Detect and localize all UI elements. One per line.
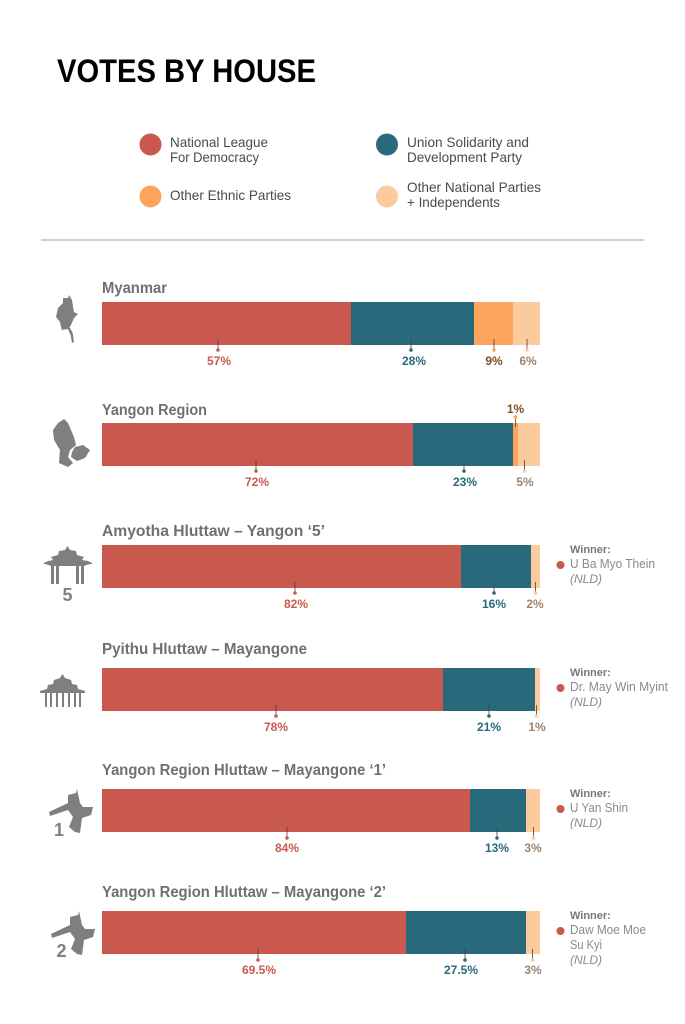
stacked bar xyxy=(102,911,540,954)
winner: Winner: xyxy=(570,788,611,800)
winner xyxy=(556,788,628,830)
panel: Yangon Region Hluttaw Mayangone 1 xyxy=(49,762,628,855)
winner: U Ba Myo Thein xyxy=(570,556,655,571)
winner: (NLD) xyxy=(570,695,602,709)
heading: Myanmar xyxy=(102,280,167,297)
value labels xyxy=(207,339,537,368)
value labels: 3% xyxy=(524,841,542,855)
icon: Yangon Region map xyxy=(53,419,90,467)
legend item: National League for Democracy: National League xyxy=(170,134,268,150)
legend item: USDP: Union Solidarity and xyxy=(407,134,529,150)
value labels xyxy=(242,949,542,977)
icon: pagoda gate 5 xyxy=(43,546,93,605)
value labels: 57% xyxy=(207,354,231,368)
heading: Pyithu Hluttaw – Mayangone xyxy=(102,641,307,658)
winner: Su Kyi xyxy=(570,937,602,952)
icon: township map 1 xyxy=(49,789,93,840)
winner: Winner: xyxy=(570,667,611,679)
value labels: 1% xyxy=(507,402,525,416)
winner: U Yan Shin xyxy=(570,800,628,815)
value labels: 1% xyxy=(528,720,546,734)
value labels: 16% xyxy=(482,597,506,611)
legend item: National League for Democracy: For Democracy xyxy=(170,149,259,165)
value labels xyxy=(264,705,546,734)
value labels: 5% xyxy=(516,475,534,489)
legend item: Other National Parties: Other National Parties xyxy=(407,179,541,195)
value labels: 21% xyxy=(477,720,501,734)
icon: township map 2 xyxy=(51,911,95,961)
value labels: 84% xyxy=(275,841,299,855)
value labels xyxy=(245,402,534,489)
legend item: National League for Democracy xyxy=(140,134,268,165)
legend item: Other Ethnic Parties: Other Ethnic Parties xyxy=(170,187,291,203)
panel: Yangon Region Hluttaw Mayangone 2 xyxy=(51,884,646,977)
value labels xyxy=(275,827,542,855)
winner: (NLD) xyxy=(570,572,602,586)
winner xyxy=(556,667,668,709)
legend item: Other National Parties: + Independents xyxy=(407,194,500,210)
value labels: 72% xyxy=(245,475,269,489)
stacked bar xyxy=(102,302,540,345)
value labels: 13% xyxy=(485,841,509,855)
heading: Yangon Region Hluttaw – Mayangone ‘2’ xyxy=(102,884,386,901)
value labels: 28% xyxy=(402,354,426,368)
value labels: 2% xyxy=(526,597,544,611)
value labels: 78% xyxy=(264,720,288,734)
title: VOTES BY HOUSE xyxy=(57,53,316,89)
legend item: Other Ethnic Parties xyxy=(140,186,291,208)
winner: Dr. May Win Myint xyxy=(570,679,668,694)
legend xyxy=(140,134,541,210)
value labels: 82% xyxy=(284,597,308,611)
stacked bar xyxy=(102,789,540,832)
panel: Myanmar xyxy=(56,280,540,368)
stacked bar xyxy=(102,668,540,711)
heading: Yangon Region Hluttaw – Mayangone ‘1’ xyxy=(102,762,386,779)
value labels: 9% xyxy=(485,354,503,368)
winner: (NLD) xyxy=(570,953,602,967)
stacked bar xyxy=(102,423,540,466)
icon: Myanmar map xyxy=(56,295,78,343)
legend item: USDP: Development Party xyxy=(407,149,522,165)
winner: Winner: xyxy=(570,910,611,922)
legend item: USDP xyxy=(376,134,529,165)
heading: Amyotha Hluttaw – Yangon ‘5’ xyxy=(102,523,325,540)
winner: Daw Moe Moe xyxy=(570,922,646,937)
heading: Yangon Region xyxy=(102,402,207,419)
winner xyxy=(556,910,646,967)
panel: Pyithu Hluttaw xyxy=(40,641,668,734)
icon: parliament building xyxy=(40,674,85,707)
value labels xyxy=(284,582,544,611)
icon: township map 2: 2 xyxy=(56,941,67,961)
icon: pagoda gate 5: 5 xyxy=(62,585,73,605)
panel: Amyotha Hluttaw xyxy=(43,523,655,611)
value labels: 69.5% xyxy=(242,963,276,977)
winner: Winner: xyxy=(570,544,611,556)
panel: Yangon Region xyxy=(53,402,540,489)
value labels: 3% xyxy=(524,963,542,977)
value labels: 23% xyxy=(453,475,477,489)
winner: (NLD) xyxy=(570,816,602,830)
winner xyxy=(556,544,655,586)
value labels: 6% xyxy=(519,354,537,368)
legend item: Other National Parties xyxy=(376,179,541,210)
value labels: 27.5% xyxy=(444,963,478,977)
stacked bar xyxy=(102,545,540,588)
icon: township map 1: 1 xyxy=(54,820,64,840)
